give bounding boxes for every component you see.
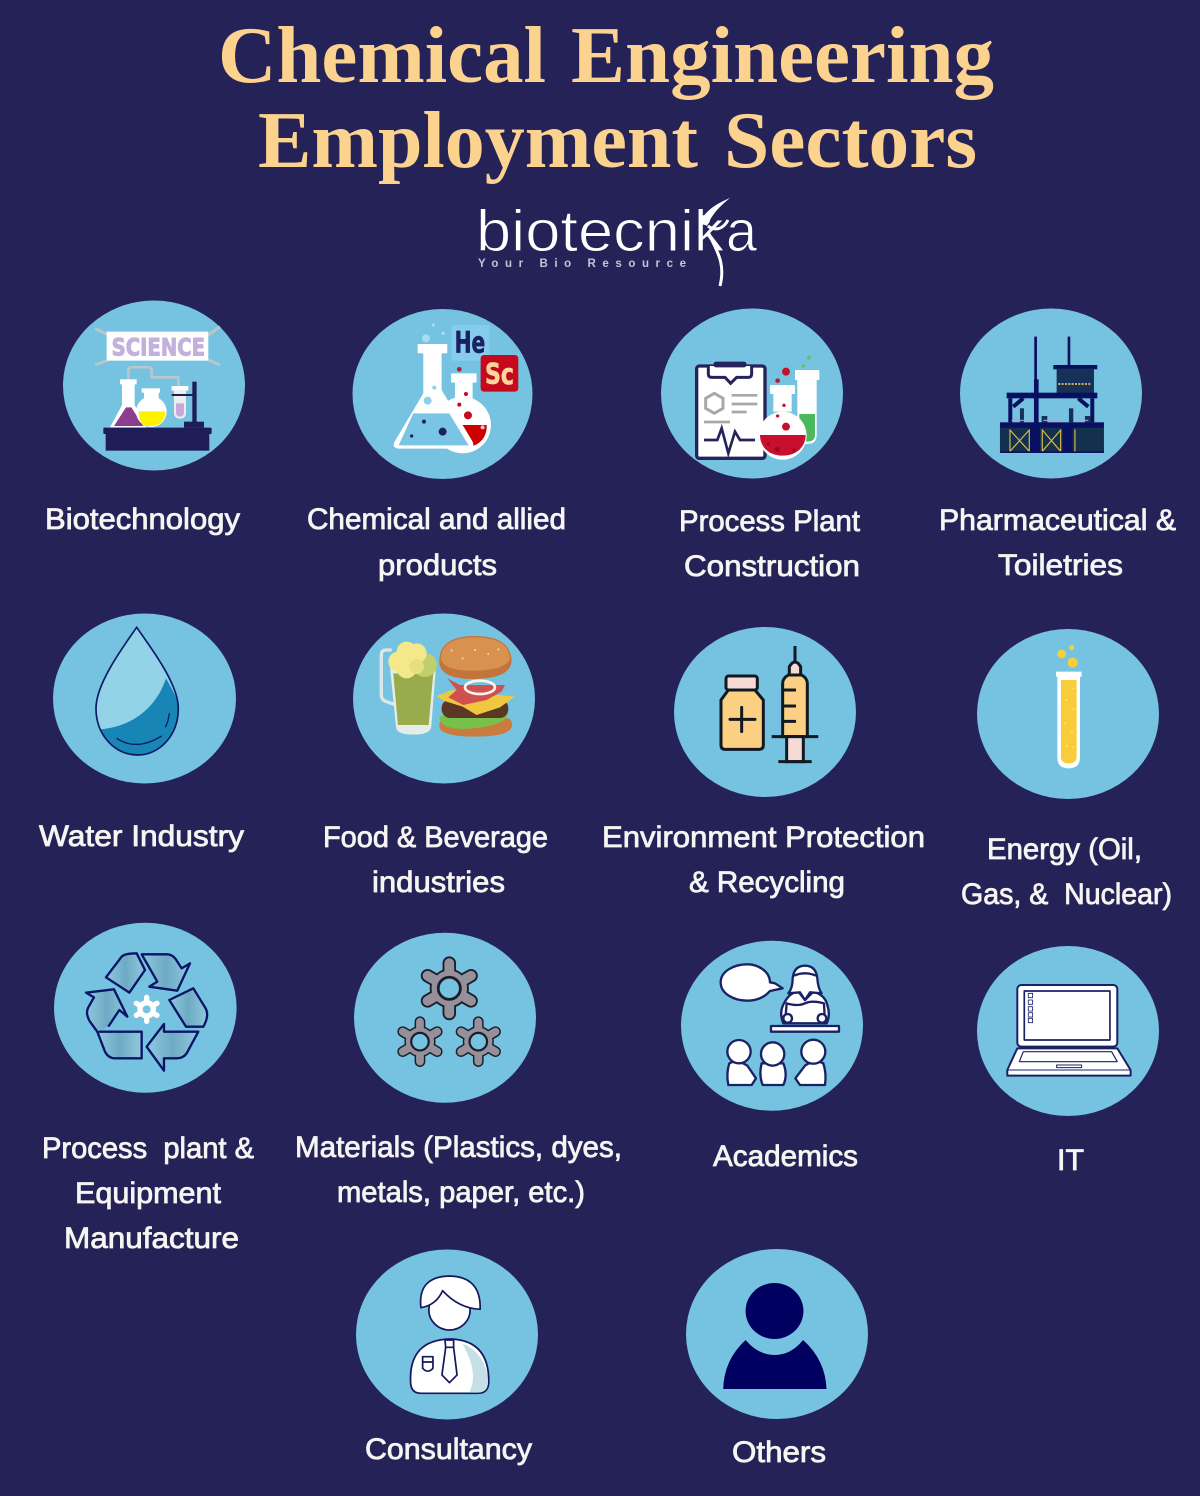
label: Chemical and allied [307,503,566,536]
title [218,12,994,185]
circle [53,614,236,784]
circle [674,627,856,797]
label: Pharmaceutical & [939,504,1176,537]
icon: beer and burger [381,636,515,737]
icon: consultant [411,1276,489,1393]
icon: gears [403,963,496,1062]
label [602,821,925,899]
panel: Chemical and allied products [307,309,566,582]
icon: science lab: SCIENCE [112,334,205,362]
label: Process plant & [42,1132,254,1165]
label: metals, paper, etc.) [337,1176,585,1209]
icon: recycling arrows [86,953,207,1071]
circle [977,946,1159,1116]
label: Others [732,1436,826,1469]
icon: water drop [96,627,178,755]
label: IT [1057,1144,1084,1177]
circle [681,941,863,1111]
circle [354,933,536,1103]
title: Sectors [724,97,977,185]
logo: biotecnika: biotecni [476,199,694,264]
panel: Process plant & Equipment Manufacture [42,923,254,1255]
icon: teacher and students [721,964,839,1085]
label: Consultancy [365,1433,532,1466]
label: Water Industry [39,820,244,853]
circle [661,308,843,478]
label: Materials (Plastics, dyes, [295,1131,622,1164]
panel: Energy [961,629,1172,911]
label: Toiletries [998,549,1123,582]
label [295,1131,622,1209]
circle [63,300,245,470]
label: Gas, & Nuclear) [961,878,1172,911]
label [679,505,861,583]
label: Equipment [75,1177,222,1210]
panel: Academics [681,941,863,1173]
label: & Recycling [689,866,845,899]
icon: person silhouette [723,1283,826,1389]
icon: flasks and elements: Sc [485,357,514,391]
panel: Water Industry [39,614,244,853]
panel: Others [686,1249,868,1469]
label: Process Plant [679,505,861,538]
panel: Pharmaceutical & Toiletries [939,308,1176,582]
title: Chemical [218,12,546,100]
logo: biotecnika: a [726,199,758,264]
circle [54,923,237,1093]
label [307,503,566,582]
panel: Consultancy [356,1250,538,1466]
label: Manufacture [64,1222,239,1255]
icon: industrial platform [1000,337,1104,453]
panel: Biotechnology [45,300,245,536]
logo: biotecnika: Your Bio Resource [478,258,686,270]
circle [353,614,535,784]
label [961,833,1172,911]
label: Environment Protection [602,821,925,854]
label [939,504,1176,582]
logo: biotecnika [476,198,758,286]
icon: test tube [1056,645,1082,768]
panel: Food & Beverage industries [323,614,548,899]
icon: flasks and elements [394,323,518,453]
title: Engineering [571,12,994,100]
logo: biotecnika: k [694,199,725,264]
circle [352,309,532,479]
icon: flasks and elements: He [455,325,485,359]
label: Academics [713,1140,858,1173]
circle [686,1249,868,1419]
panel: Environment Protection & Recycling [602,627,925,899]
icon: laptop [1007,985,1131,1076]
label: Biotechnology [45,503,240,536]
panel: IT [977,946,1159,1177]
label: industries [372,866,505,899]
icon: science lab [95,327,220,451]
label: Energy (Oil, [987,833,1142,866]
panel: Process Plant Construction [661,308,861,583]
circle [977,629,1159,799]
title: Employment [258,97,698,185]
circle [960,308,1142,478]
label [42,1132,254,1255]
label: Construction [684,550,860,583]
icon: clipboard and flasks [697,356,819,460]
icon: bottle and syringe [721,646,818,762]
label: Food & Beverage [323,821,548,854]
circle [356,1250,538,1420]
label [323,821,548,899]
label: products [378,549,497,582]
panel: Materials [295,933,622,1209]
